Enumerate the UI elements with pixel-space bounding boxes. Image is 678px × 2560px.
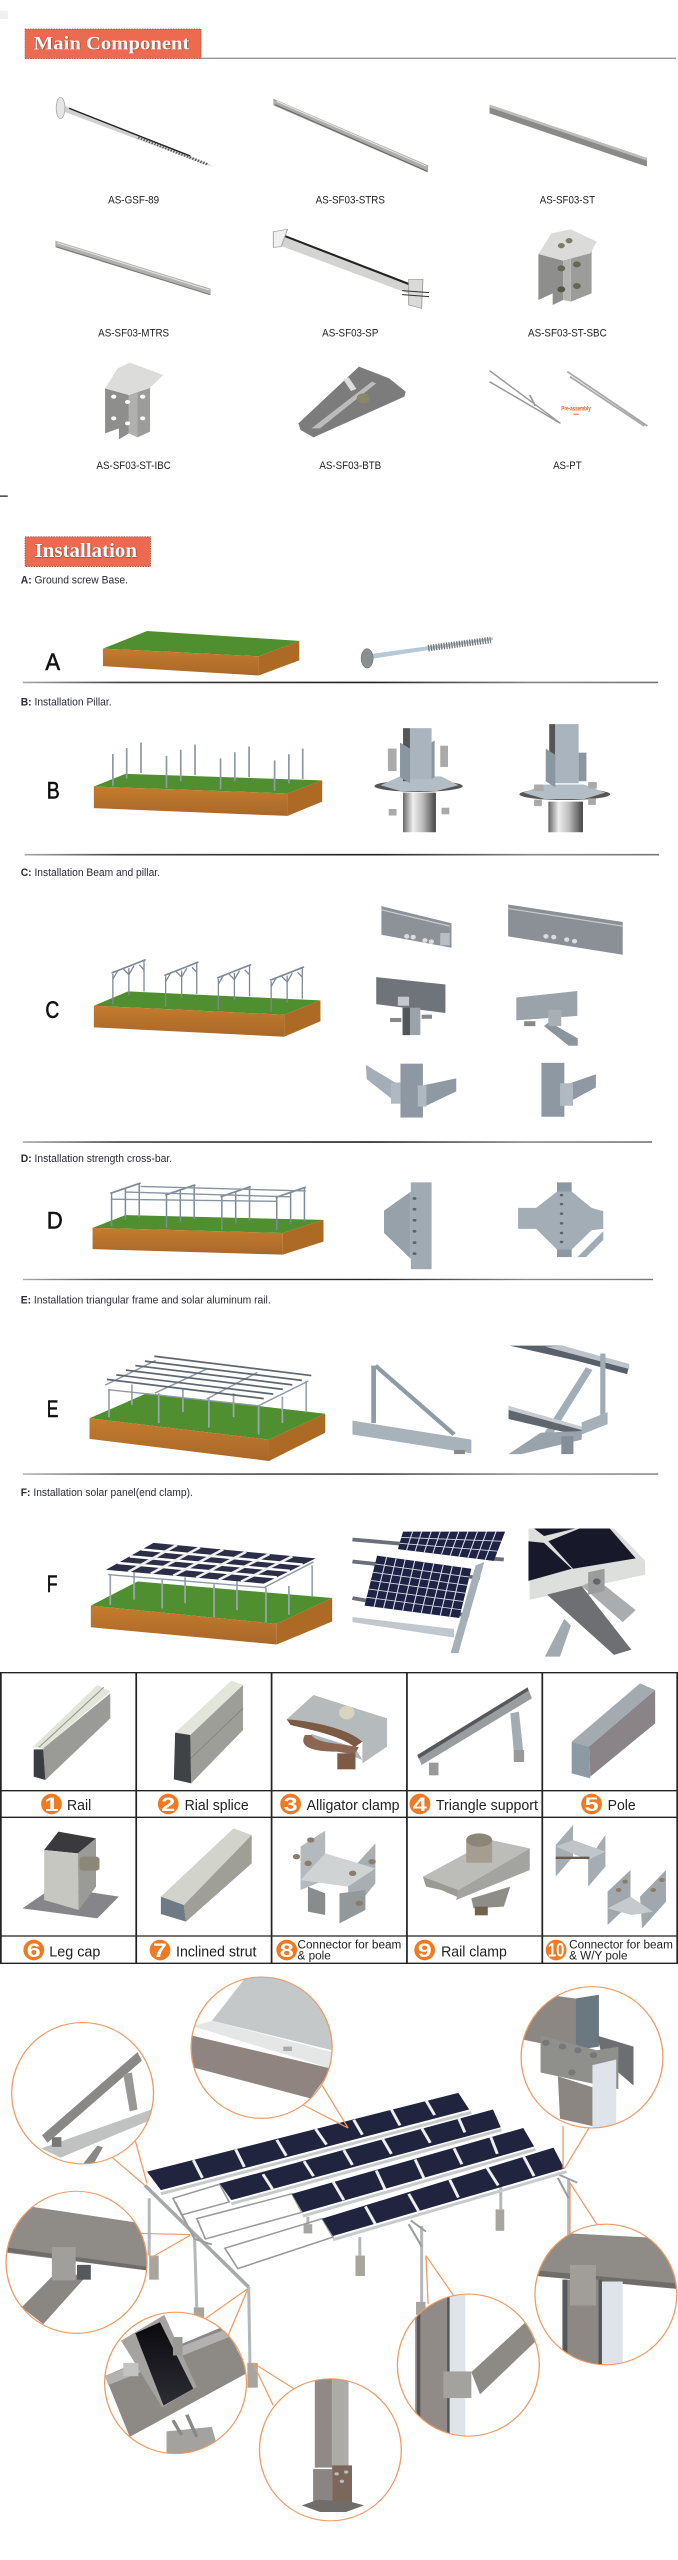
labels: part numbers: AS-SF03-ST-IBC (96, 459, 171, 472)
solar panel row 1 (147, 2093, 469, 2190)
solar panel detail (352, 1532, 505, 1653)
separator C (23, 1141, 652, 1143)
table labels with number badges: 9 (418, 1940, 432, 1961)
labels: part numbers: AS-SF03-SP (322, 326, 378, 339)
caption E: E: Installation triangular frame and solar aluminum rail. (21, 1294, 271, 1306)
structure: rails and empty frames (161, 2112, 567, 2269)
part 7: inclined strut (161, 1828, 252, 1922)
callout: beam with brace (0, 2191, 147, 2333)
caption B: B: Installation Pillar. (21, 697, 112, 709)
section: installation steps A to C (21, 537, 659, 1143)
part 5: pole (572, 1683, 655, 1778)
callout: panel edge clamp (191, 1976, 333, 2118)
labels: part numbers (96, 193, 607, 472)
letter E: E (47, 1395, 58, 1423)
part 8: connector for beam and pole (296, 1831, 375, 1923)
end clamp detail (528, 1528, 645, 1657)
part 6: leg cap (22, 1832, 119, 1918)
labels: part numbers: AS-SF03-ST-SBC (528, 326, 607, 339)
table labels with number badges: Connector for beam (298, 1937, 401, 1951)
table labels with number badges: Rial splice (185, 1797, 249, 1813)
beam joint detail 1 (381, 906, 451, 948)
part: rail AS-SF03-ST (490, 105, 647, 167)
table labels with number badges: 4 (413, 1794, 427, 1815)
callout: rail end profile (105, 2312, 249, 2454)
section: installation steps D to F (21, 1152, 658, 1657)
table labels with number badges: 8 (280, 1940, 294, 1961)
part: bracket AS-SF03-ST-SBC (538, 229, 597, 305)
ground block B with pillars (94, 742, 322, 816)
table labels with number badges: & W/Y pole (569, 1948, 628, 1962)
part 4: triangle support (417, 1687, 532, 1775)
letter F: F (47, 1570, 58, 1597)
ground block D with frames (93, 1183, 323, 1255)
separator D (23, 1279, 653, 1280)
table labels with number badges (23, 1794, 673, 1962)
callout: beam on pole front (535, 2224, 677, 2365)
callout: pole and brace (397, 2294, 539, 2437)
ground screw (361, 638, 493, 668)
part 3: alligator clamp (287, 1695, 387, 1769)
table labels with number badges: Leg cap (49, 1944, 100, 1960)
ground block C with frames (94, 960, 320, 1037)
heading rule (201, 56, 676, 60)
labels: part numbers: AS-SF03-MTRS (98, 326, 169, 339)
heading: Main Component (25, 29, 201, 59)
structure: poles and weights (145, 2174, 577, 2388)
table labels with number badges: & pole (298, 1948, 331, 1962)
section: main component (0, 11, 676, 497)
pillar and braces detail 5 (366, 1064, 456, 1118)
heading: Installation: Installation (35, 539, 137, 562)
beam joint detail 2 (508, 904, 623, 955)
solar panel row 4 (322, 2148, 564, 2236)
base plate detail 1 (375, 728, 463, 832)
part: rail AS-SF03-STRS (273, 99, 428, 173)
callout: leg cap base (259, 2379, 401, 2521)
labels: part numbers: AS-SF03-BTB (319, 459, 381, 472)
letter A: A (45, 649, 60, 676)
table labels with number badges: 5 (585, 1794, 599, 1815)
separator B (25, 854, 659, 856)
solar panel row 3 (292, 2128, 534, 2212)
ground block E with frame and rails (90, 1356, 325, 1461)
part 2: rail splice (174, 1681, 243, 1783)
cross-bar detail 2 (518, 1182, 603, 1257)
solar panel row 2 (220, 2109, 501, 2200)
beam and strut detail 4 (516, 991, 578, 1046)
heading: Installation (25, 537, 150, 567)
table labels with number badges: 6 (27, 1940, 41, 1961)
triangle frame detail (352, 1366, 471, 1454)
labels: part numbers: AS-SF03-STRS (316, 193, 385, 206)
separator E (23, 1473, 658, 1475)
part 1: rail (32, 1685, 110, 1780)
system overview illustration (0, 1976, 677, 2521)
cross-bar detail 1 (384, 1182, 432, 1269)
part: rail AS-SF03-MTRS (55, 241, 211, 295)
letter C: C (45, 997, 59, 1024)
caption D: D: Installation strength cross-bar. (21, 1152, 172, 1165)
table grid (0, 1673, 678, 1963)
caption C: C: Installation Beam and pillar. (21, 867, 160, 879)
ground block A (103, 631, 299, 676)
part 10: connector for beam and W/Y pole (556, 1825, 666, 1928)
ground block F with solar array (91, 1543, 332, 1645)
labels: part numbers: AS-PT (553, 459, 582, 472)
heading: Main Component: Main Component (34, 32, 190, 54)
callout: triangle support (12, 2023, 154, 2165)
beam and pillar detail 3 (376, 977, 445, 1035)
table labels with number badges: 3 (284, 1794, 298, 1815)
letter D: D (47, 1206, 63, 1234)
pillar and brace detail 6 (541, 1063, 596, 1117)
part: preassembled triangle AS-PT (490, 371, 647, 426)
table labels with number badges: Alligator clamp (307, 1797, 400, 1813)
base plate detail 2 (519, 724, 610, 832)
callout: beam on pole (521, 1987, 663, 2128)
part: bracket AS-SF03-ST-IBC (105, 363, 163, 439)
parts table (0, 1673, 678, 1963)
caption F: F: Installation solar panel(end clamp). (21, 1486, 193, 1499)
table labels with number badges: Rail (67, 1797, 91, 1813)
table labels with number badges: Inclined strut (176, 1944, 257, 1960)
part 9: rail clamp (423, 1833, 530, 1915)
table labels with number badges: 7 (153, 1940, 167, 1961)
part: ground screw AS-GSF-89 (56, 97, 213, 167)
labels: part numbers: AS-SF03-ST (540, 193, 595, 206)
leader lines (112, 2085, 597, 2405)
table labels with number badges: Pole (608, 1797, 636, 1813)
table labels with number badges: 10 (548, 1939, 564, 1961)
table labels with number badges: Rail clamp (441, 1944, 507, 1960)
letter B: B (47, 777, 60, 804)
part: support AS-SF03-SP (273, 229, 429, 308)
separator A (23, 682, 658, 683)
caption A: A: Ground screw Base. (21, 575, 128, 587)
labels: part numbers: AS-GSF-89 (108, 193, 159, 206)
table labels with number badges: Triangle support (436, 1797, 538, 1813)
table labels with number badges: 1 (44, 1794, 58, 1815)
part: bracket AS-SF03-BTB (298, 367, 406, 437)
part: preassembled triangle AS-PT: Pre-assembly (561, 406, 591, 412)
table labels with number badges: 2 (161, 1794, 175, 1815)
rail detail (509, 1346, 629, 1454)
